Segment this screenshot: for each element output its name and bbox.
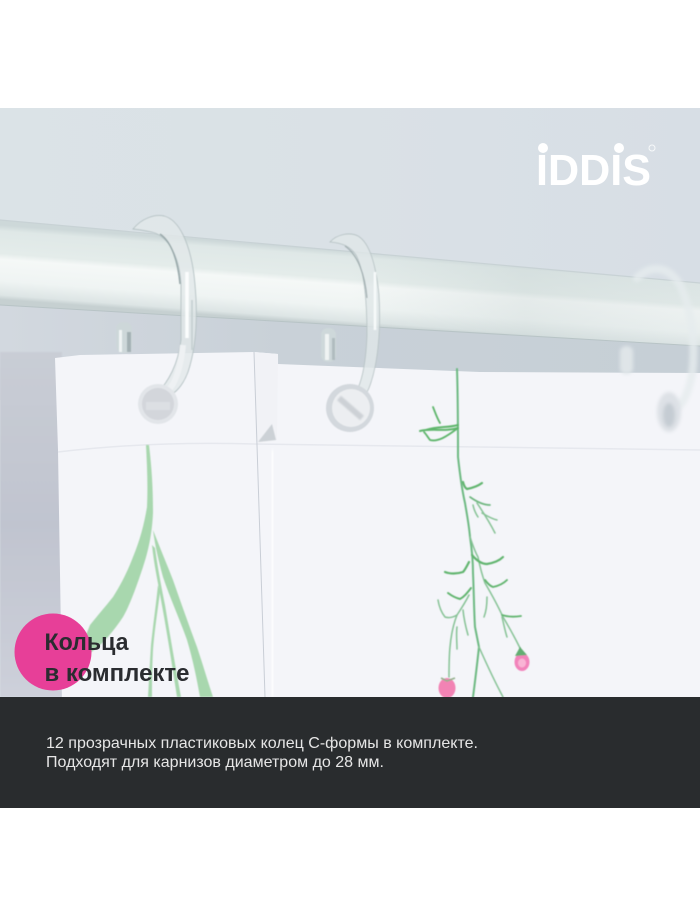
heading: rings included: Кольца <box>44 629 129 656</box>
plant: large green leaves <box>84 445 213 697</box>
photo: curtain on rod <box>0 108 700 698</box>
wall background <box>0 108 700 697</box>
caption text <box>46 735 478 771</box>
ring 1 <box>133 216 196 424</box>
logo: IDDIS: IDDIS <box>536 146 651 195</box>
heading: rings included <box>44 629 190 687</box>
ring 2 <box>326 234 380 432</box>
icon: pink bud right <box>514 647 530 671</box>
curtain cloth <box>55 352 700 697</box>
heading: rings included: в комплекте <box>44 660 190 687</box>
wall left of curtain <box>0 352 62 697</box>
caption text: 12 прозрачных пластиковых колец С-формы в комплекте. <box>46 735 478 752</box>
plant: thin stem with buds <box>420 369 521 697</box>
ring peg 3 <box>620 346 633 374</box>
shadow band below rod <box>0 306 700 373</box>
dark caption band <box>0 697 700 808</box>
ring peg 1 <box>118 330 132 352</box>
icon: pink bud left <box>438 678 456 698</box>
ring peg 2 <box>324 333 335 361</box>
ring 3 <box>637 269 694 432</box>
curtain rod <box>0 220 700 346</box>
pink circle accent <box>14 614 92 690</box>
caption text: Подходят для карнизов диаметром до 28 мм. <box>46 754 384 771</box>
